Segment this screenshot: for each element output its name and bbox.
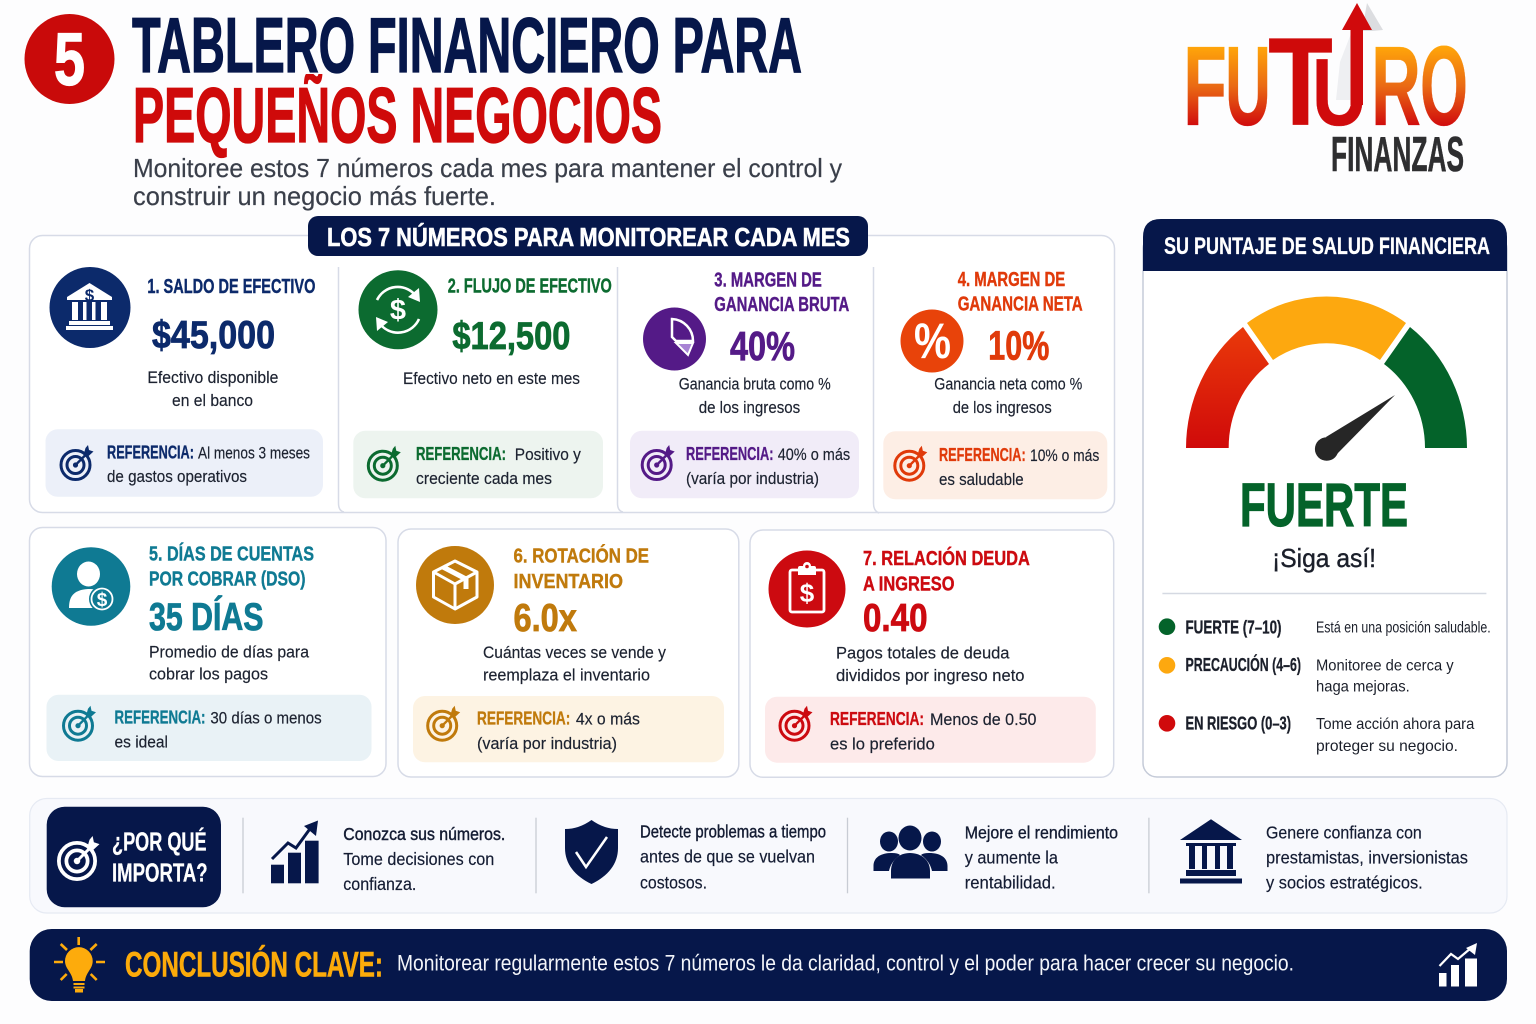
card 5: días de cuentas por cobrar: [30, 528, 386, 776]
panel: seven numbers, top row frame: [30, 236, 1114, 513]
text: genere confianza: Genere confianza con: [1266, 822, 1422, 842]
description: Ganancia bruta como %: [679, 374, 831, 393]
icon: cash cycle: $: [390, 294, 406, 326]
description: Pagos totales de deuda: [836, 643, 1010, 662]
benchmark box: REFERENCIA:: [477, 708, 570, 728]
heading: GANANCIA BRUTA: [714, 294, 849, 316]
heading pill: los 7 números: [308, 216, 868, 256]
benchmark box: REFERENCIA:: [686, 444, 774, 464]
description: de los ingresos: [699, 398, 800, 417]
heading: 7. RELACIÓN DEUDA: [863, 546, 1030, 570]
text: detecte problemas: [640, 822, 826, 892]
benchmark box: REFERENCIA:: [830, 709, 924, 729]
icon: clipboard: $: [800, 578, 815, 608]
text: detecte problemas: Detecte problemas a tiempo: [640, 822, 826, 842]
heading: GANANCIA NETA: [958, 293, 1083, 315]
heading: [714, 270, 849, 316]
benchmark box: creciente cada mes: [416, 470, 552, 488]
icon: bank: [50, 267, 130, 348]
text: mejore el rendimiento: [965, 822, 1118, 892]
heading: [514, 544, 649, 593]
legend: fuerte: FUERTE (7–10): [1186, 617, 1282, 637]
description: en el banco: [172, 391, 253, 410]
logo: Futuro Finanzas: [1183, 3, 1468, 182]
text: mejore el rendimiento: y aumente la: [965, 847, 1058, 867]
benchmark box: Al menos 3 meses: [198, 445, 310, 463]
icon: people: [874, 826, 948, 878]
legend: fuerte: Está en una posición saludable.: [1316, 620, 1491, 637]
message: Monitorear regularmente estos 7 números le da claridad, control y el poder para hacer crecer su negocio.: [397, 950, 1294, 976]
gauge: [1186, 297, 1467, 461]
text: detecte problemas: antes de que se vuelvan: [640, 847, 815, 867]
card 4: margen de ganancia neta: [883, 269, 1107, 499]
icon: percent: %: [914, 313, 951, 369]
description: [483, 643, 666, 685]
benchmark box: 40% o más: [778, 446, 850, 464]
description: [147, 368, 278, 410]
legend: en riesgo: Tome acción ahora para: [1316, 716, 1474, 733]
heading: [863, 546, 1030, 595]
description: [149, 642, 310, 683]
benchmark box: [630, 431, 859, 498]
badge: why it matters: ¿POR QUÉ: [112, 827, 207, 857]
heading: 1. SALDO DE EFECTIVO: [147, 276, 315, 298]
text: conozca sus números: [343, 824, 505, 894]
text: genere confianza: [1266, 822, 1468, 892]
benchmark box: (varía por industria): [477, 735, 617, 753]
logo: Futuro Finanzas: U: [1225, 23, 1271, 149]
text: detecte problemas: costosos.: [640, 872, 707, 892]
benchmark box: [46, 695, 372, 761]
legend: en riesgo: EN RIESGO (0–3): [1186, 714, 1291, 734]
benchmark box: es saludable: [939, 471, 1024, 489]
card 1: saldo de efectivo: [46, 267, 323, 497]
benchmark box: REFERENCIA:: [416, 444, 506, 464]
card 3: margen de ganancia bruta: [630, 270, 859, 498]
benchmark box: REFERENCIA:: [114, 707, 206, 727]
benchmark box: 30 días o menos: [210, 709, 322, 727]
benchmark box: [353, 431, 603, 498]
value: $12,500: [452, 315, 570, 358]
panel header: [1143, 219, 1507, 271]
benchmark box: [883, 431, 1107, 499]
badge: why it matters: IMPORTA?: [112, 858, 208, 888]
benchmark box: REFERENCIA:: [939, 445, 1026, 465]
value: 35 DÍAS: [149, 595, 264, 639]
text: conozca sus números: Tome decisiones con: [343, 849, 494, 869]
benchmark box: es ideal: [114, 734, 168, 752]
legend: precaución: Monitoree de cerca y: [1316, 657, 1454, 674]
icon: light bulb: [54, 937, 105, 992]
badge: number 5: 5: [54, 18, 85, 101]
text: mejore el rendimiento: Mejore el rendimiento: [965, 822, 1118, 842]
description: [836, 643, 1024, 685]
heading: CONCLUSIÓN CLAVE:: [125, 945, 383, 985]
description: Efectivo neto en este mes: [403, 369, 580, 388]
benchmark box: Positivo y: [515, 446, 582, 464]
benchmark box: [765, 697, 1096, 763]
value: 40%: [730, 323, 795, 369]
benchmark box: [413, 696, 724, 762]
panel: puntaje de salud financiera: [1143, 219, 1507, 777]
heading: [149, 542, 314, 591]
legend: precaución: haga mejoras.: [1316, 679, 1410, 696]
legend: en riesgo: proteger su negocio.: [1316, 738, 1458, 755]
icon: pie chart: [643, 308, 706, 370]
benchmark box: (varía por industria): [686, 470, 819, 488]
badge: why it matters: [47, 807, 221, 907]
icon: cash cycle: [358, 270, 438, 349]
heading: POR COBRAR (DSO): [149, 569, 306, 591]
logo: Futuro Finanzas: T: [1268, 13, 1333, 152]
description: [679, 374, 831, 417]
description: Promedio de días para: [149, 642, 310, 661]
logo: Futuro Finanzas: U: [1312, 39, 1367, 146]
benchmark box: 4x o más: [576, 710, 640, 728]
heading: 4. MARGEN DE: [958, 269, 1065, 291]
heading pill: los 7 números: LOS 7 NÚMEROS PARA MONITOREAR CADA MES: [327, 222, 850, 252]
benchmark box: de gastos operativos: [107, 468, 247, 486]
icon: person with coin: $: [97, 590, 108, 611]
heading: 5. DÍAS DE CUENTAS: [149, 542, 314, 565]
benchmark box: REFERENCIA:: [107, 443, 194, 463]
text: conozca sus números: Conozca sus números.: [343, 824, 505, 844]
subtitle: construir un negocio más fuerte.: [133, 181, 496, 211]
heading: 6. ROTACIÓN DE: [514, 544, 649, 568]
card 7: relación deuda a ingreso: [750, 530, 1114, 777]
value: 10%: [988, 322, 1049, 368]
benchmark box: es lo preferido: [830, 735, 935, 753]
heading: 2. FLUJO DE EFECTIVO: [448, 276, 612, 298]
description: divididos por ingreso neto: [836, 666, 1024, 685]
icon: bank: $: [85, 286, 95, 305]
description: reemplaza el inventario: [483, 666, 650, 685]
benchmark box: [46, 429, 323, 497]
text: genere confianza: prestamistas, inversionistas: [1266, 847, 1468, 867]
description: cobrar los pagos: [149, 664, 268, 683]
heading: [958, 269, 1083, 315]
badge: number 5: [24, 14, 114, 104]
legend: en riesgo: [1159, 714, 1474, 755]
text: genere confianza: y socios estratégicos.: [1266, 872, 1423, 892]
status: fuerte: FUERTE: [1240, 471, 1408, 539]
value: 0.40: [863, 597, 928, 640]
description: Efectivo disponible: [147, 368, 278, 387]
card 2: flujo de efectivo: [353, 270, 612, 498]
text: conozca sus números: confianza.: [343, 874, 416, 894]
legend: precaución: [1159, 654, 1454, 696]
logo: Futuro Finanzas: O: [1420, 23, 1468, 149]
description: de los ingresos: [953, 398, 1052, 417]
heading: A INGRESO: [863, 573, 954, 595]
description: Cuántas veces se vende y: [483, 643, 666, 662]
legend: fuerte: [1159, 617, 1491, 637]
legend: precaución: PRECAUCIÓN (4–6): [1186, 654, 1301, 675]
icon: percent: [900, 310, 964, 372]
text: mejore el rendimiento: rentabilidad.: [965, 872, 1056, 892]
title: PEQUEÑOS NEGOCIOS: [133, 71, 662, 159]
icon: growth chart: [271, 820, 319, 883]
subtitle: Monitoree estos 7 números cada mes para mantener el control y: [133, 153, 842, 183]
icon: small growth chart: [1439, 943, 1477, 986]
icon: institution: [1180, 819, 1242, 884]
description: Ganancia neta como %: [934, 374, 1082, 393]
subtitle: [133, 153, 842, 211]
logo: Futuro Finanzas: F: [1183, 23, 1227, 149]
heading: INVENTARIO: [514, 571, 623, 593]
icon: box: [416, 546, 494, 624]
logo: Futuro Finanzas: R: [1371, 23, 1421, 149]
value: $45,000: [152, 314, 275, 357]
icon: shield: [565, 820, 618, 884]
value: 6.0x: [514, 597, 577, 640]
icon: clipboard: [768, 550, 846, 628]
benchmark box: 10% o más: [1030, 447, 1099, 465]
heading: 3. MARGEN DE: [714, 270, 822, 292]
status message: ¡Siga así!: [1272, 543, 1376, 573]
banner: conclusión clave: [30, 929, 1507, 1001]
strip: por qué importa: [30, 798, 1507, 913]
title: [132, 17, 802, 158]
card 6: rotación de inventario: [398, 529, 739, 777]
description: [934, 374, 1082, 417]
icon: person with coin: [52, 547, 130, 626]
title: TABLERO FINANCIERO PARA: [132, 1, 802, 89]
benchmark box: Menos de 0.50: [930, 711, 1036, 729]
